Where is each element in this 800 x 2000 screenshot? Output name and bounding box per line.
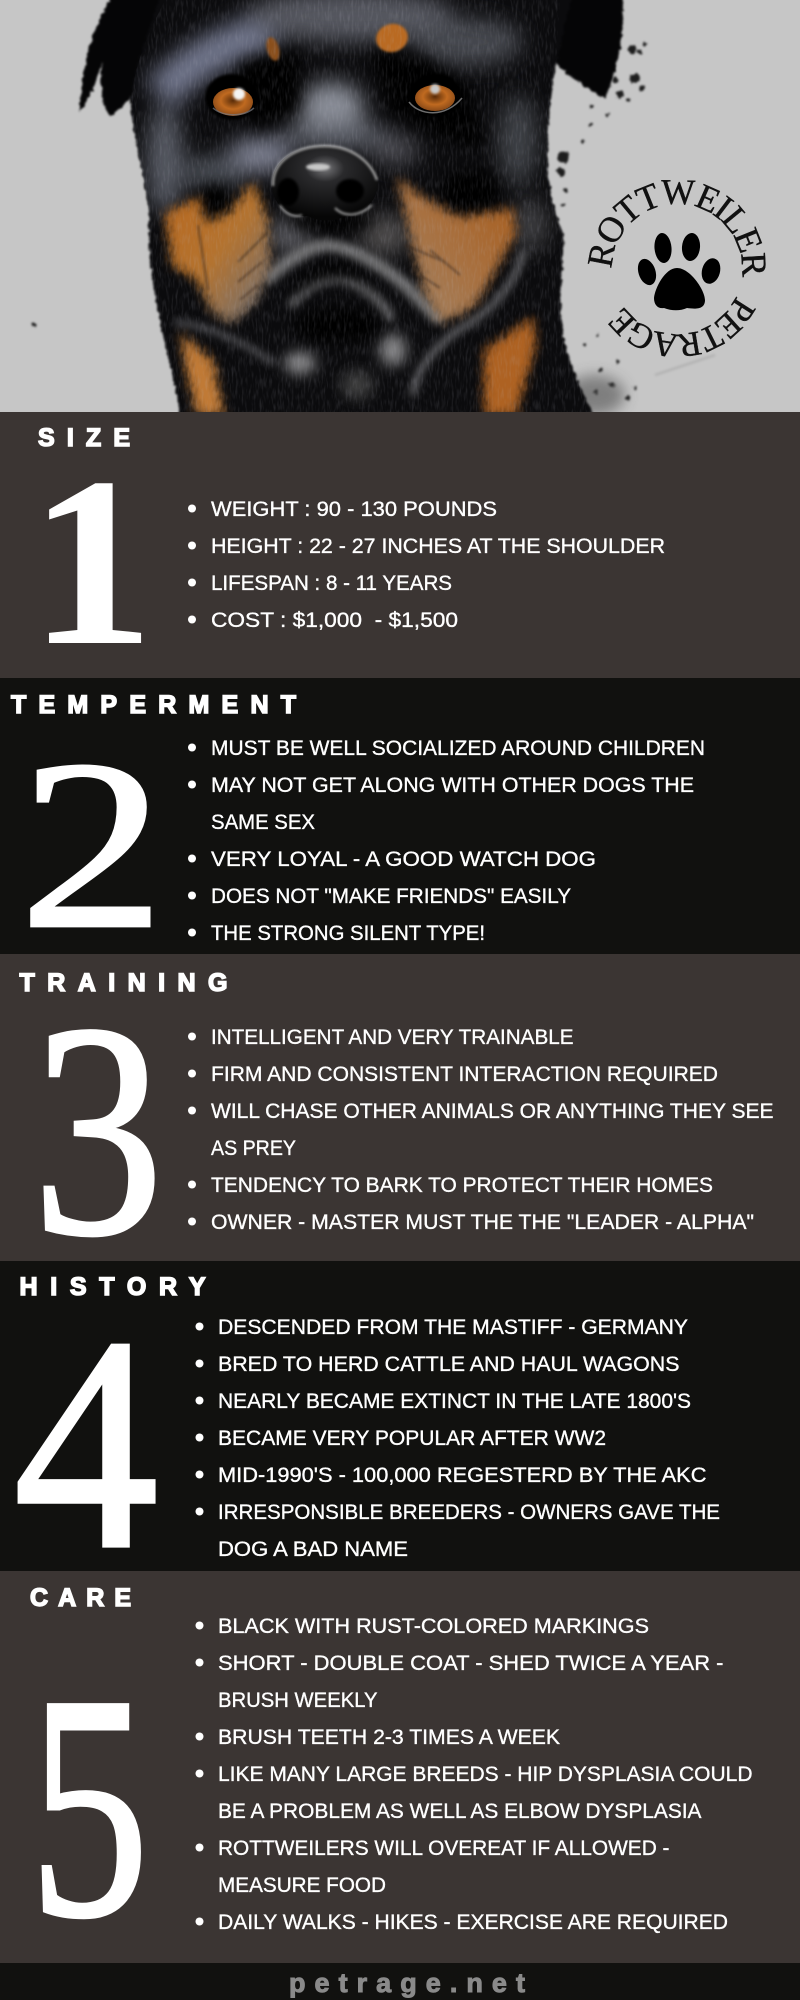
heading: CARE: CARE xyxy=(30,1584,131,1612)
left eye xyxy=(205,74,259,120)
bullet list: care xyxy=(196,1614,752,1934)
rust cheeks xyxy=(165,177,516,324)
bullet list: temperment: SAME SEX xyxy=(211,810,315,834)
splatter behind dog xyxy=(32,42,647,400)
heading: TRAINING: TRAINING xyxy=(20,969,228,997)
heading: HISTORY: HISTORY xyxy=(20,1273,206,1301)
bullet list: size xyxy=(188,497,665,632)
head silhouette xyxy=(130,0,595,420)
numeral 1: 1 xyxy=(29,429,154,696)
panel: temperment xyxy=(0,678,800,979)
bullet list: care: BRUSH WEEKLY xyxy=(218,1688,378,1712)
bullet list: care: LIKE MANY LARGE BREEDS - HIP DYSPLASIA COULD xyxy=(218,1762,752,1786)
bullet list: history xyxy=(196,1315,720,1561)
bullet list: history: DOG A BAD NAME xyxy=(218,1537,408,1561)
black eye masks xyxy=(199,50,500,343)
panel: history xyxy=(0,1261,800,1613)
panel: care xyxy=(0,1571,800,1985)
bullet list: temperment: MUST BE WELL SOCIALIZED AROUND CHILDREN xyxy=(211,736,705,760)
fur grain overlay xyxy=(120,0,600,412)
bullet list: training: FIRM AND CONSISTENT INTERACTION REQUIRED xyxy=(211,1062,718,1086)
bullet list: temperment: MAY NOT GET ALONG WITH OTHER DOGS THE xyxy=(211,773,694,797)
bullet list: history: DESCENDED FROM THE MASTIFF - GERMANY xyxy=(218,1315,688,1339)
bullet list: temperment: THE STRONG SILENT TYPE! xyxy=(211,921,485,945)
logo: rottweiler petrage badge xyxy=(588,180,766,356)
numeral 3: 3 xyxy=(32,962,163,1299)
bullet list: care: DAILY WALKS - HIKES - EXERCISE ARE REQUIRED xyxy=(218,1910,728,1934)
logo text: PETRAGE: PETRAGE xyxy=(608,296,756,356)
panel: size xyxy=(0,412,800,696)
bullet list: size: LIFESPAN : 8 - 11 YEARS xyxy=(211,571,452,595)
bullet list: temperment: DOES NOT "MAKE FRIENDS" EASILY xyxy=(211,884,571,908)
bullet list: size: WEIGHT : 90 - 130 POUNDS xyxy=(211,497,497,521)
fur: grey forehead and sides xyxy=(147,0,548,255)
heading: TEMPERMENT: TEMPERMENT xyxy=(11,691,296,719)
rust brow markings xyxy=(264,20,411,62)
nose xyxy=(272,146,378,220)
bullet list: training: OWNER - MASTER MUST THE THE "LEADER - ALPHA" xyxy=(211,1210,754,1234)
ears xyxy=(78,0,160,118)
bullet list: history: BECAME VERY POPULAR AFTER WW2 xyxy=(218,1426,606,1450)
bullet list: size: HEIGHT : 22 - 27 INCHES AT THE SHOULDER xyxy=(211,534,665,558)
bullet list: care: BLACK WITH RUST-COLORED MARKINGS xyxy=(218,1614,649,1638)
bullet list: care: ROTTWEILERS WILL OVEREAT IF ALLOWED - xyxy=(218,1836,670,1860)
hero image: rottweiler portrait xyxy=(0,0,800,420)
bullet list: training: TENDENCY TO BARK TO PROTECT THEIR HOMES xyxy=(211,1173,713,1197)
bullet list: history: BRED TO HERD CATTLE AND HAUL WAGONS xyxy=(218,1352,680,1376)
numeral 2: 2 xyxy=(19,711,165,979)
bullet list: history: MID-1990'S - 100,000 REGESTERD BY THE AKC xyxy=(218,1463,706,1487)
heading: SIZE: SIZE xyxy=(38,424,130,452)
bullet list: temperment: VERY LOYAL - A GOOD WATCH DOG xyxy=(211,847,596,871)
lower rust chest xyxy=(180,317,536,415)
icon: paw print xyxy=(635,232,723,310)
lower grey patches xyxy=(284,334,406,399)
bullet list: training: AS PREY xyxy=(211,1136,296,1160)
numeral 4: 4 xyxy=(14,1275,158,1613)
bullet list: care: BE A PROBLEM AS WELL AS ELBOW DYSPLASIA xyxy=(218,1799,702,1823)
bullet list: training xyxy=(188,1025,774,1234)
bullet list: training: WILL CHASE OTHER ANIMALS OR ANYTHING THEY SEE xyxy=(211,1099,774,1123)
bullet list: care: BRUSH TEETH 2-3 TIMES A WEEK xyxy=(218,1725,561,1749)
footer: website xyxy=(0,1963,800,2000)
bullet list: care: SHORT - DOUBLE COAT - SHED TWICE A YEAR - xyxy=(218,1651,724,1675)
right eye xyxy=(408,73,462,117)
bullet list: history: NEARLY BECAME EXTINCT IN THE LATE 1800'S xyxy=(218,1389,691,1413)
logo text: ROTTWEILER: ROTTWEILER xyxy=(588,180,766,278)
panel: training xyxy=(0,954,800,1299)
bullet list: history: IRRESPONSIBLE BREEDERS - OWNERS GAVE THE xyxy=(218,1500,720,1524)
bullet list: training: INTELLIGENT AND VERY TRAINABLE xyxy=(211,1025,574,1049)
bullet list: size: COST : $1,000 - $1,500 xyxy=(211,608,458,632)
bullet list: temperment xyxy=(188,736,705,945)
bullet list: care: MEASURE FOOD xyxy=(218,1873,386,1897)
footer text: petrage.net xyxy=(289,1968,525,1998)
muzzle folds: grey xyxy=(177,245,523,393)
numeral 5: 5 xyxy=(29,1630,149,1985)
